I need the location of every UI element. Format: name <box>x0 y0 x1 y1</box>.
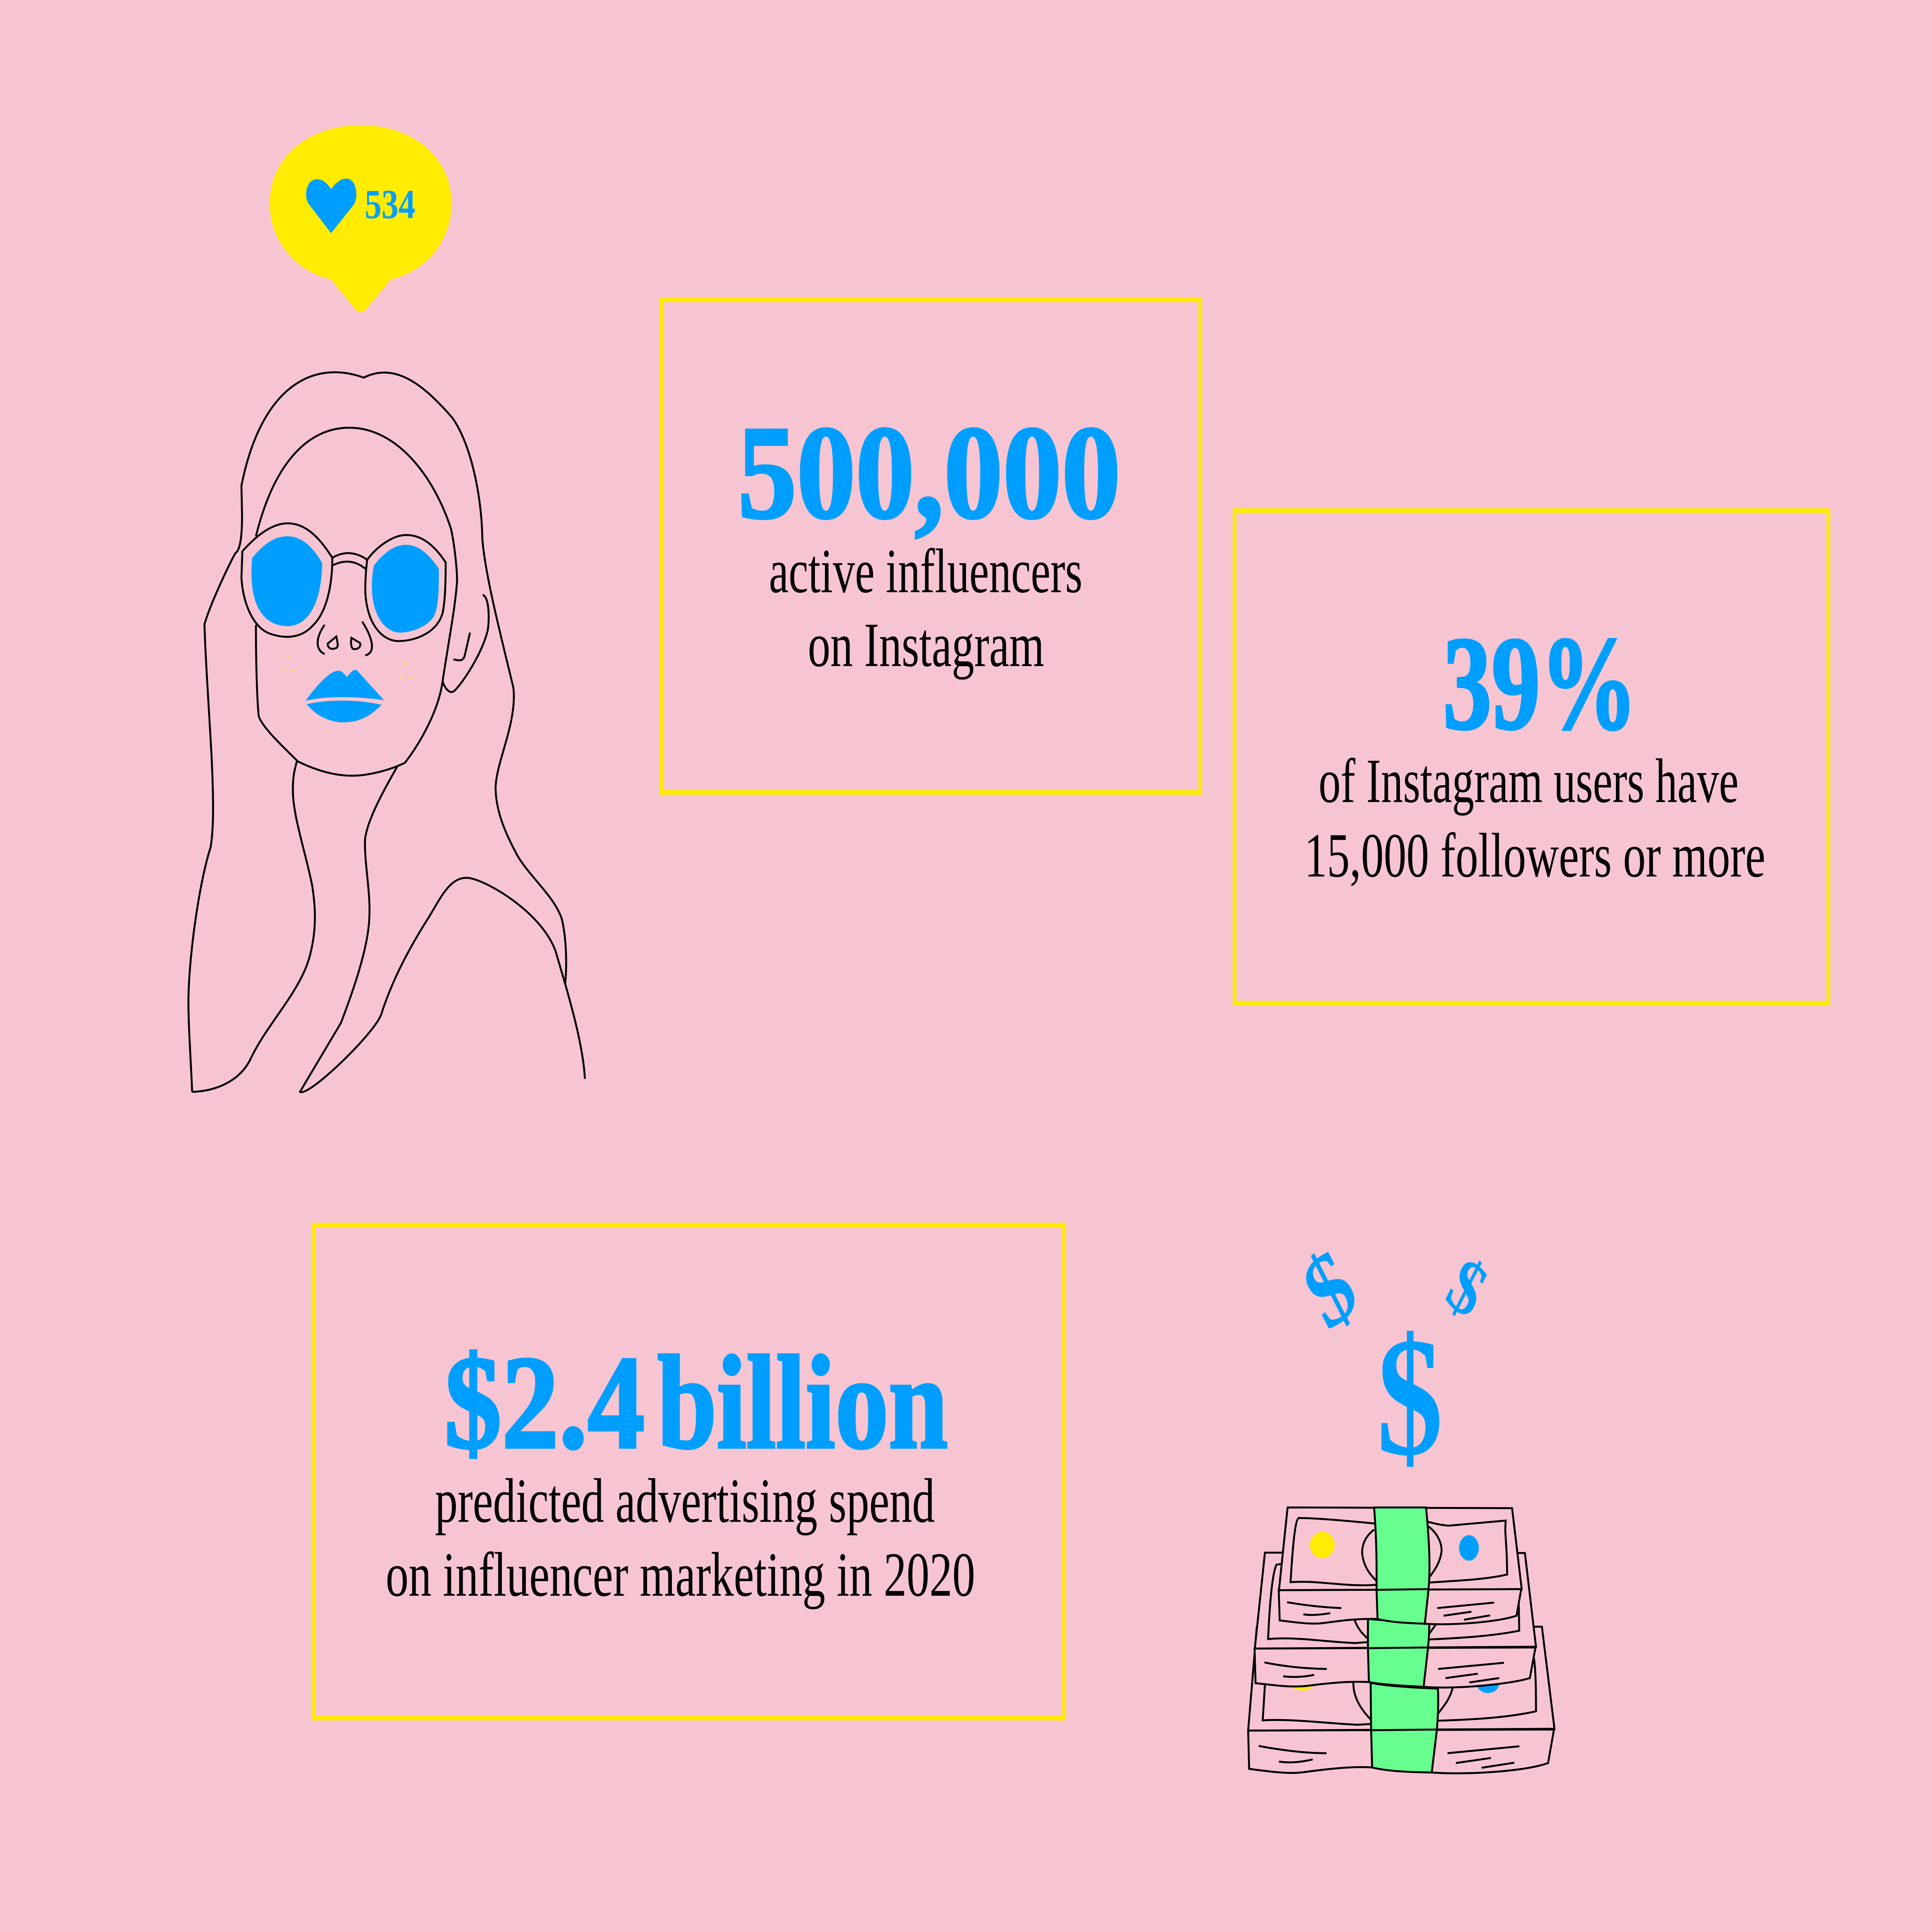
freckles <box>282 655 412 679</box>
sunglasses lenses <box>252 536 322 626</box>
bottom stack <box>1248 1627 1554 1773</box>
like count: 534 <box>365 181 415 227</box>
big number: 500,000: 500,000 <box>738 399 1121 547</box>
big number: $2.4 billion <box>444 1329 948 1477</box>
icon: floating dollar signs <box>1288 1226 1499 1491</box>
nose <box>318 622 372 655</box>
dollar sign large: $ <box>1377 1303 1443 1491</box>
ear <box>442 595 489 692</box>
text: 15,000 followers or more: 15,000 followers or more <box>1304 821 1765 890</box>
panel: active influencers stat <box>662 300 1200 793</box>
big number: 39%: 39% <box>1443 610 1637 757</box>
text: on Instagram: on Instagram <box>808 610 1044 680</box>
dollar sign tilted left: $ <box>1288 1226 1372 1352</box>
face outline <box>256 428 457 776</box>
text: active influencers: active influencers <box>769 536 1082 606</box>
bubble shape <box>270 125 452 312</box>
big number: $2.4 billion: billion <box>657 1329 948 1477</box>
illustration: stacks of banknotes <box>1248 1507 1554 1773</box>
icon: heart <box>306 179 356 233</box>
text: on influencer marketing in 2020: on influencer marketing in 2020 <box>386 1540 975 1609</box>
text: predicted advertising spend: predicted advertising spend <box>435 1466 935 1536</box>
sunglasses frames <box>242 523 332 637</box>
illustration: woman with sunglasses <box>189 372 585 1092</box>
text: of Instagram users have: of Instagram users have <box>1318 746 1738 816</box>
icon: like notification bubble <box>270 125 452 312</box>
dollar sign tilted right: $ <box>1435 1240 1499 1336</box>
big number: $2.4 billion: $2.4 <box>444 1329 645 1477</box>
panel: share of users with 15,000 followers <box>1235 510 1828 1003</box>
middle stack <box>1255 1553 1536 1687</box>
top stack <box>1279 1507 1522 1624</box>
lips <box>306 670 384 723</box>
panel: advertising spend stat <box>314 1225 1064 1718</box>
